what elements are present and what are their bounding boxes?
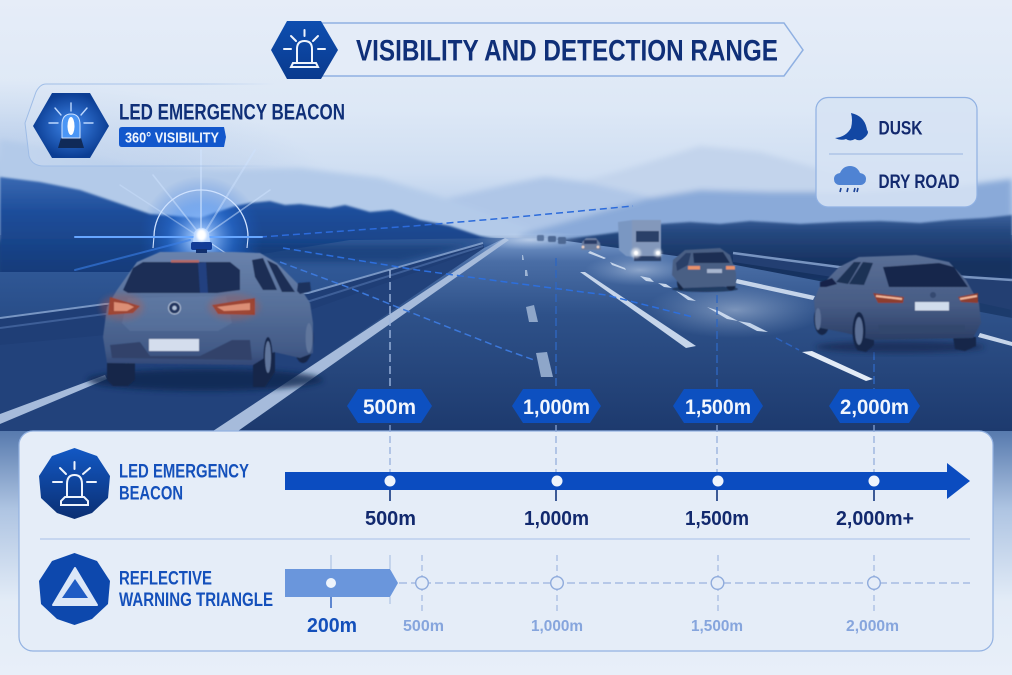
row: LED beacon <box>39 448 970 530</box>
beam dashed lines <box>260 206 799 360</box>
callout: LED emergency beacon <box>25 84 345 166</box>
labels: 200m <box>307 615 357 637</box>
range arrow <box>285 463 970 499</box>
left treeline <box>0 177 500 275</box>
boot panel <box>122 296 232 331</box>
callout heading: LED EMERGENCY BEACON <box>119 100 345 124</box>
label: reflective warning triangle: REFLECTIVE <box>119 568 212 590</box>
rear windscreen <box>123 262 240 293</box>
labels: 1,500m <box>691 618 743 635</box>
short range bar <box>285 569 398 597</box>
badge: 1,500m <box>673 389 763 423</box>
right guardrail <box>733 253 1012 310</box>
beacon light burst <box>75 150 270 300</box>
labels: 500m <box>403 618 444 635</box>
tail lights <box>100 294 260 320</box>
beacon unit <box>191 228 212 253</box>
markers and labels: 1,500m <box>685 508 749 530</box>
road surface <box>0 238 1012 431</box>
right treeline <box>540 215 1012 335</box>
left guardrail <box>0 243 484 345</box>
icon: title beacon <box>271 21 338 79</box>
label: LED emergency beacon: LED EMERGENCY <box>119 462 249 482</box>
icon: triangle <box>39 553 110 625</box>
badge: 500m: 500m <box>363 396 416 419</box>
distant cars <box>537 235 601 250</box>
title text: VISIBILITY AND DETECTION RANGE <box>356 34 778 68</box>
badge: 2,000m: 2,000m <box>840 396 909 419</box>
icon: beacon <box>39 448 110 519</box>
labels: 2,000m <box>846 618 899 635</box>
badge: 1,000m: 1,000m <box>523 396 590 419</box>
badge: 1,500m: 1,500m <box>685 396 751 419</box>
number plate <box>149 339 199 351</box>
headlight glow <box>475 230 825 338</box>
title banner <box>271 21 803 79</box>
page background <box>0 431 1012 675</box>
label: dusk: DUSK <box>878 118 923 140</box>
pill: 360 visibility: 360° VISIBILITY <box>125 130 219 146</box>
panel: range comparison <box>19 425 993 651</box>
scene: dusk highway <box>0 0 1012 431</box>
labels: 1,000m <box>531 618 583 635</box>
row: reflective warning triangle <box>39 553 970 637</box>
badge: 2,000m <box>829 389 920 423</box>
badge <box>168 302 180 314</box>
dashed track <box>399 582 970 584</box>
icon: moon <box>835 113 868 140</box>
truck <box>618 220 662 261</box>
police car: rear view <box>87 228 323 391</box>
road markings <box>0 238 1012 431</box>
icon: rain cloud <box>834 166 866 192</box>
label: dry road: DRY ROAD <box>878 172 960 193</box>
label: reflective warning triangle: WARNING TRIANGLE <box>119 590 273 611</box>
car body <box>103 252 313 365</box>
distant hills <box>0 140 1012 240</box>
badge: 1,000m <box>512 389 601 423</box>
distance badges <box>347 389 920 423</box>
vertical guide lines in panel <box>390 425 874 472</box>
markers and labels: 1,000m <box>524 508 589 530</box>
wheels <box>107 313 314 387</box>
lower bumper <box>110 340 252 360</box>
mirror <box>297 282 311 294</box>
markers <box>326 555 880 611</box>
labels <box>307 615 899 637</box>
left field <box>0 238 505 431</box>
side windows <box>252 258 277 290</box>
right car: rear view <box>814 255 985 353</box>
legend: conditions <box>816 98 977 207</box>
markers and labels <box>365 476 914 530</box>
mid car <box>672 248 738 292</box>
icon: glowing beacon <box>33 93 109 158</box>
markers and labels: 2,000m+ <box>836 508 914 530</box>
vertical guide lines upper <box>390 258 874 390</box>
badge: 500m <box>347 389 432 423</box>
label: LED emergency beacon: BEACON <box>119 484 183 504</box>
markers and labels: 500m <box>365 508 416 530</box>
